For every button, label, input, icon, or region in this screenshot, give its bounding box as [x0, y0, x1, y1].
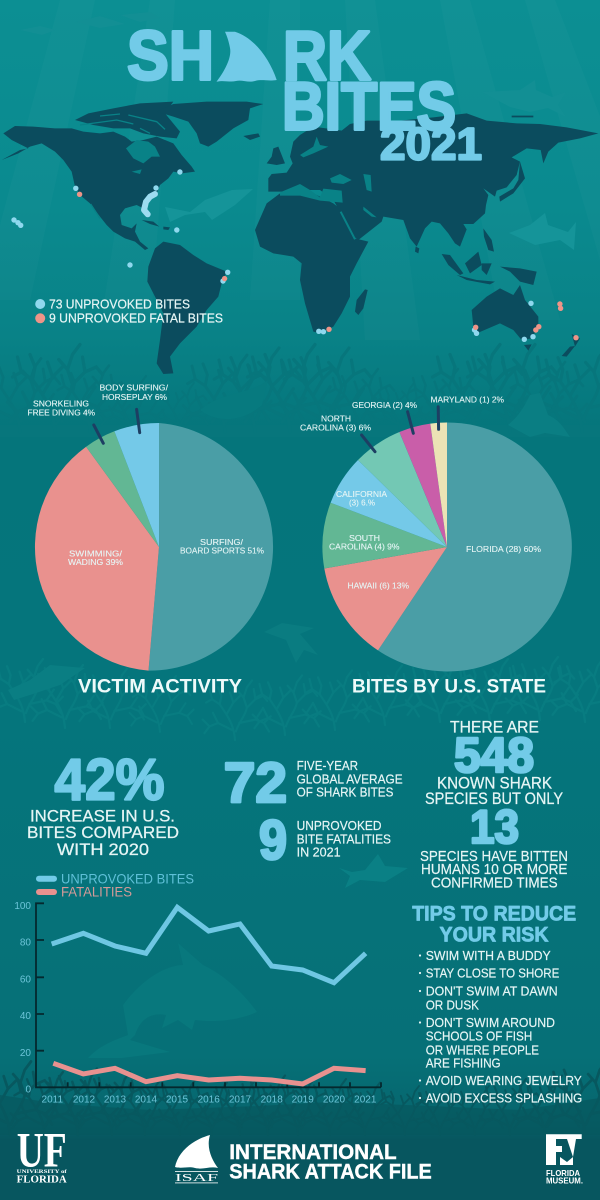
- stat: 42 percent increase: [27, 748, 179, 859]
- y axis labels: 20: [20, 1048, 31, 1059]
- y axis labels: 60: [20, 975, 31, 986]
- pie chart: victim activity: SURFING/: [200, 538, 244, 547]
- y axis labels: [14, 901, 31, 1096]
- world map: [2, 102, 598, 374]
- pie chart: bites by state: CALIFORNIA: [336, 490, 388, 499]
- logo: University of Florida: [17, 1122, 67, 1185]
- logo: University of Florida: FLORIDA: [17, 1174, 67, 1185]
- tips to reduce your risk: OR DUSK: [426, 998, 480, 1012]
- pie chart: bites by state: FLORIDA (28) 60%: [466, 545, 541, 554]
- pie chart: bites by state: NORTH: [321, 414, 351, 423]
- pie chart: bites by state: CAROLINA (4) 9%: [329, 543, 400, 552]
- background: upper coral reef silhouette: [0, 344, 600, 437]
- pie chart: victim activity: WADING 39%: [68, 558, 123, 567]
- heading: victim activity: VICTIM ACTIVITY: [78, 676, 242, 698]
- tips to reduce your risk: [412, 903, 582, 1106]
- line: unprovoked bites: [52, 907, 366, 983]
- map: Eurasia, Africa, Oceania: [255, 113, 598, 357]
- stat: 548 known species: KNOWN SHARK: [437, 774, 552, 792]
- logo: Florida Museum: MUSEUM.: [546, 1176, 583, 1186]
- y axis labels: 40: [20, 1011, 31, 1022]
- logo: ISAF fin: ISAF: [175, 1172, 218, 1184]
- x axis labels: 2011: [42, 1094, 63, 1105]
- background: lower faint coral reef: [0, 657, 600, 740]
- pie chart: bites by state: CAROLINA (3) 6%: [300, 423, 371, 432]
- stat: 72 five-year average: FIVE-YEAR: [297, 758, 358, 773]
- fatal bite dots: [77, 192, 579, 340]
- tips to reduce your risk: TIPS TO REDUCE: [412, 903, 576, 926]
- map legend: 73 UNPROVOKED BITES: [49, 297, 190, 311]
- logo: Florida Museum: FLORIDA: [546, 1168, 580, 1178]
- logo: ISAF fin: [175, 1135, 218, 1184]
- background: bottom dark coral reef: [0, 1062, 600, 1135]
- pie chart: bites by state: [300, 396, 572, 671]
- stat: 548 known species: 13: [470, 800, 519, 853]
- x axis labels: 2018: [261, 1094, 283, 1105]
- tips to reduce your risk: OR WHERE PEOPLE: [426, 1043, 539, 1057]
- tips to reduce your risk: DON'T SWIM AT DAWN: [426, 985, 558, 999]
- map legend: [35, 297, 223, 326]
- stat: 548 known species: THERE ARE: [450, 718, 539, 736]
- tips to reduce your risk: ARE FISHING: [426, 1057, 501, 1071]
- pie chart: bites by state: (3) 6.%: [349, 499, 375, 508]
- pie chart: victim activity: SNORKELING: [33, 400, 89, 409]
- pie chart: bites by state: SOUTH: [349, 534, 380, 543]
- x axis labels: 2017: [229, 1094, 252, 1105]
- y axis labels: 100: [14, 901, 31, 912]
- title: 2021: [380, 118, 482, 170]
- stat: 548 known species: [420, 718, 568, 892]
- tips to reduce your risk: STAY CLOSE TO SHORE: [426, 967, 559, 981]
- map legend: 9 UNPROVOKED FATAL BITES: [49, 312, 223, 326]
- pie chart: victim activity: BOARD SPORTS 51%: [180, 546, 264, 555]
- pie chart: bites by state: MARYLAND (1) 2%: [430, 396, 504, 405]
- stat: 9 fatalities: IN 2021: [297, 845, 341, 860]
- tips to reduce your risk: YOUR RISK: [440, 924, 548, 947]
- chart legend: FATALITIES: [61, 884, 132, 900]
- x axis labels: 2019: [292, 1094, 314, 1105]
- pie chart: victim activity: FREE DIVING 4%: [28, 408, 95, 417]
- stat: 548 known species: SPECIES BUT ONLY: [425, 790, 563, 808]
- stat: 42 percent increase: 42%: [54, 748, 164, 812]
- stat: 548 known species: HUMANS 10 OR MORE: [421, 861, 568, 878]
- heading: bites by U.S. state: BITES BY U.S. STATE: [352, 676, 546, 698]
- x axis labels: [42, 1094, 377, 1105]
- icon: shark fin letter A: [216, 32, 277, 82]
- x axis labels: 2016: [198, 1094, 220, 1105]
- tips to reduce your risk: DON'T SWIM AROUND: [426, 1016, 555, 1030]
- x axis labels: 2020: [323, 1094, 346, 1105]
- pie chart: victim activity: BODY SURFING/: [100, 384, 169, 393]
- logo text: International Shark Attack File: SHARK ATTACK FILE: [229, 1160, 432, 1183]
- stat: 42 percent increase: BITES COMPARED: [27, 824, 179, 842]
- stat: 72 five-year average: [224, 751, 403, 815]
- x axis labels: 2021: [354, 1094, 377, 1105]
- title: SH: [127, 16, 214, 94]
- stat: 72 five-year average: 72: [224, 751, 287, 815]
- logo: University of Florida: UF: [17, 1122, 67, 1178]
- tips to reduce your risk: AVOID EXCESS SPLASHING: [426, 1092, 582, 1106]
- tips to reduce your risk: SCHOOLS OF FISH: [426, 1029, 532, 1043]
- stat: 548 known species: CONFIRMED TIMES: [431, 875, 558, 892]
- stat: 548 known species: 548: [454, 729, 534, 783]
- x axis labels: 2014: [135, 1094, 158, 1105]
- x axis labels: 2013: [104, 1094, 127, 1105]
- title: BITES: [282, 68, 456, 144]
- y axis labels: 0: [25, 1085, 31, 1096]
- pie chart: victim activity: [28, 384, 273, 671]
- pie chart: bites by state: GEORGIA (2) 4%: [352, 401, 417, 410]
- x axis labels: 2015: [166, 1094, 189, 1105]
- map markers: [11, 169, 579, 342]
- x axis labels: 2012: [73, 1094, 96, 1105]
- stat: 9 fatalities: 9: [259, 808, 287, 871]
- chart legend: UNPROVOKED BITES: [61, 870, 194, 886]
- line: fatalities: [53, 1063, 366, 1084]
- title: [127, 16, 482, 170]
- y axis labels: 80: [20, 938, 31, 949]
- title: RK: [283, 16, 371, 94]
- stat: 72 five-year average: OF SHARK BITES: [297, 785, 394, 800]
- tips to reduce your risk: AVOID WEARING JEWELRY: [426, 1074, 582, 1088]
- stat: 9 fatalities: [259, 808, 391, 871]
- logo text: International Shark Attack File: [229, 1141, 432, 1183]
- map: Americas and Greenland: [2, 102, 285, 374]
- logo text: International Shark Attack File: INTERNATIONAL: [229, 1141, 397, 1164]
- stat: 548 known species: SPECIES HAVE BITTEN: [420, 848, 568, 865]
- line chart: bites 2011 to 2021: [14, 901, 381, 1105]
- logo: University of Florida: UNIVERSITY of: [17, 1170, 67, 1175]
- stat: 72 five-year average: GLOBAL AVERAGE: [297, 771, 403, 786]
- tips to reduce your risk: SWIM WITH A BUDDY: [426, 949, 551, 963]
- pie chart: victim activity: SWIMMING/: [69, 549, 123, 558]
- chart axes: [36, 903, 381, 1087]
- unprovoked bite dots: [11, 169, 536, 342]
- stat: 42 percent increase: INCREASE IN U.S.: [30, 808, 175, 826]
- chart legend: [36, 870, 194, 900]
- logo: Florida Museum: [546, 1134, 583, 1186]
- pie chart: victim activity: HORSEPLAY 6%: [102, 393, 167, 402]
- stat: 9 fatalities: BITE FATALITIES: [297, 831, 391, 846]
- pie chart: bites by state: HAWAII (6) 13%: [348, 582, 409, 591]
- stat: 9 fatalities: UNPROVOKED: [297, 818, 382, 833]
- stat: 42 percent increase: WITH 2020: [57, 841, 149, 859]
